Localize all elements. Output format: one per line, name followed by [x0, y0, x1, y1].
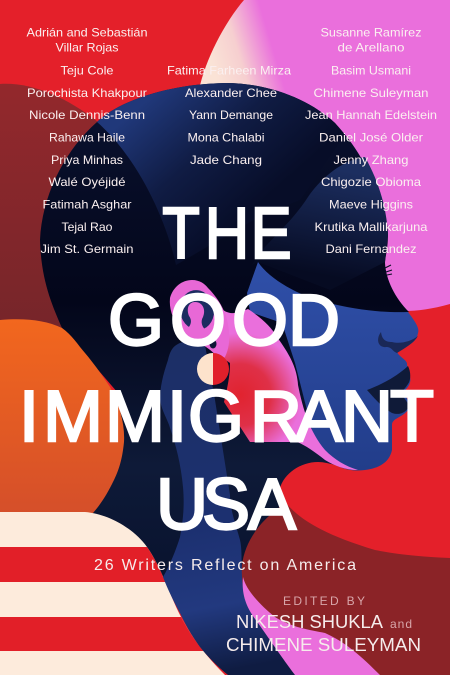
inner ear: [177, 287, 217, 333]
contributor names left column: Jim St. Germain: [40, 243, 134, 256]
contributor names left column: Adrián and Sebastián: [26, 26, 148, 40]
contributor names left column: Priya Minhas: [51, 154, 123, 167]
contributor names left column: Nicole Dennis-Benn: [29, 109, 145, 122]
pink ribbon from ear to chin: [200, 309, 358, 470]
inner ear keyhole: [186, 302, 208, 334]
contributor names left column: Rahawa Haile: [49, 132, 125, 144]
pink ribbon bottom: [243, 577, 380, 675]
contributor names right column: Chigozie Obioma: [321, 176, 422, 189]
earring red half: [213, 353, 229, 385]
contributor names right column: Dani Fernandez: [326, 243, 417, 256]
contributor names left column: Porochista Khakpour: [27, 87, 147, 100]
small dark drop: [210, 340, 216, 348]
contributor names middle column: Alexander Chee: [185, 87, 277, 100]
nostril: [378, 332, 418, 353]
contributor names right column: [305, 26, 437, 256]
and label: and: [390, 617, 412, 631]
contributor names middle column: Yann Demange: [189, 109, 273, 122]
contributor names right column: Chimene Suleyman: [314, 87, 428, 100]
contributor names left column: [26, 26, 148, 256]
orange shape: [0, 319, 124, 513]
title: THE: [162, 194, 292, 274]
contributor names middle column: Jade Chang: [190, 154, 262, 167]
contributor names right column: Maeve Higgins: [329, 198, 413, 212]
contributor names left column: Fatimah Asghar: [42, 198, 132, 212]
editor name one: NIKESH SHUKLA: [236, 612, 383, 632]
contributor names middle column: Fatima Farheen Mirza: [167, 64, 292, 78]
title: GOOD: [108, 281, 340, 361]
red stripe upper: [0, 547, 165, 582]
contributor names right column: Jenny Zhang: [334, 154, 408, 167]
contributor names right column: Susanne Ramírez: [320, 26, 422, 40]
contributor names right column: Daniel José Older: [319, 132, 423, 144]
contributor names left column: Villar Rojas: [56, 42, 119, 54]
head silhouette hair: [40, 83, 409, 600]
dark red lower right shape: [240, 503, 450, 675]
neck navy shape: [160, 342, 300, 675]
ear outer: [170, 280, 229, 362]
edited by label: EDITED BY: [283, 594, 365, 608]
contributor names right column: Jean Hannah Edelstein: [305, 109, 437, 122]
eyelashes: [385, 265, 392, 275]
contributor names left column: Walé Oyéjidé: [48, 176, 126, 189]
subtitle: 26 Writers Reflect on America: [94, 557, 356, 574]
lips: [367, 366, 410, 414]
dark red left shape: [0, 84, 110, 340]
contributor names right column: Basim Usmani: [331, 64, 411, 78]
hair crown highlight: [97, 83, 345, 265]
contributor names left column: Teju Cole: [60, 64, 114, 78]
title: IMMIGRANT: [19, 377, 434, 457]
stripes panel: [0, 510, 240, 675]
hair lower highlight: [252, 157, 388, 290]
title: [19, 194, 434, 545]
contributor names right column: Krutika Mallikarjuna: [314, 221, 428, 234]
earring cream half: [197, 353, 213, 385]
red stripe lower: [0, 617, 203, 651]
contributor names left column: Tejal Rao: [62, 221, 112, 234]
contributor names middle column: Mona Chalabi: [188, 132, 264, 144]
editor name two: CHIMENE SULEYMAN: [226, 635, 421, 655]
cream and pink background shape: [199, 0, 450, 311]
ear: [170, 280, 229, 362]
editors credit: [226, 594, 421, 655]
contributor names right column: de Arellano: [338, 42, 404, 54]
title: USA: [156, 465, 296, 545]
earring: [197, 353, 229, 385]
contributor names middle column: [167, 64, 292, 167]
blue face profile: [247, 262, 418, 471]
